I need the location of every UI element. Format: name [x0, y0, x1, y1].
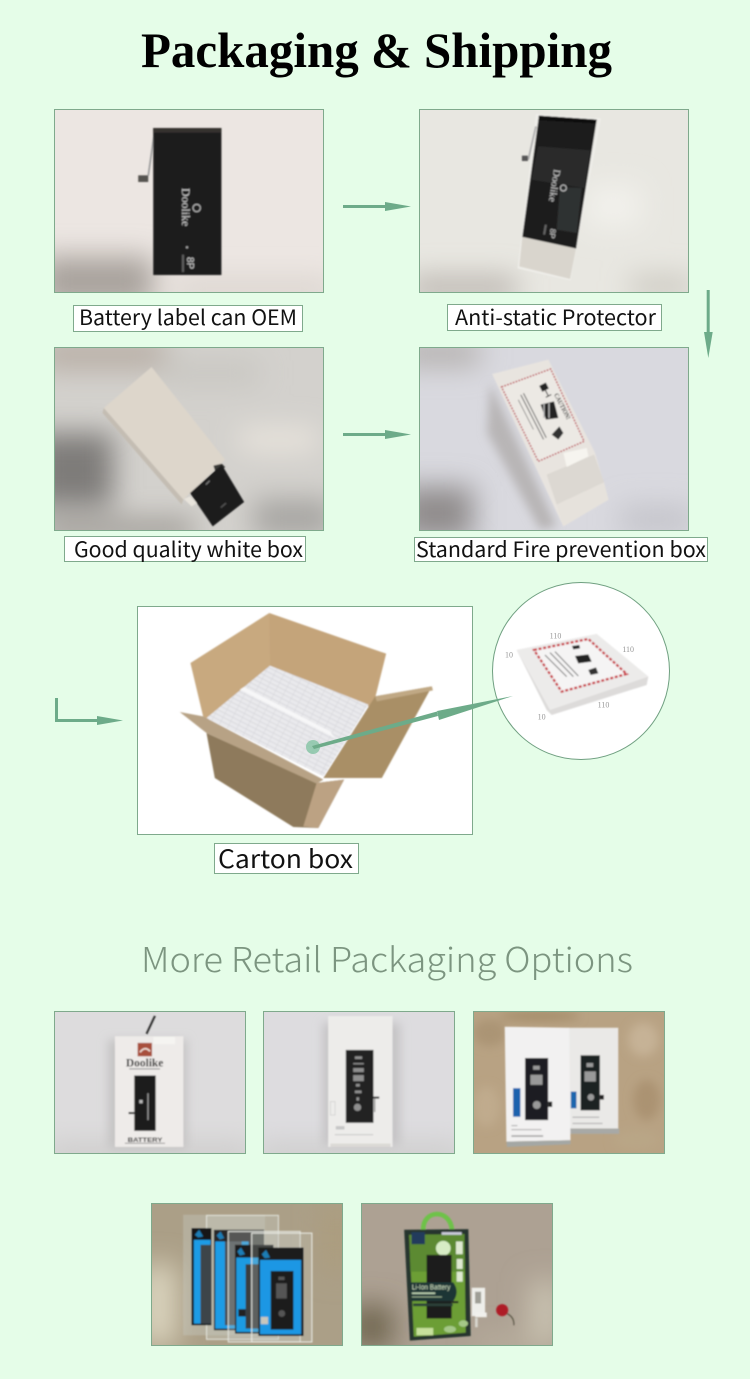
arrow: carton to detail circle	[306, 696, 513, 754]
arrow: elbow to carton	[55, 698, 123, 725]
stacked white boxes	[206, 666, 368, 776]
carton back left flap	[190, 613, 273, 720]
panel: retail option green hanging box	[350, 1203, 560, 1352]
panel: battery label photo: 8P	[184, 257, 195, 270]
panel: fire prevention box photo: CAUTION!	[552, 392, 571, 421]
panel: retail option clear blister packs	[140, 1203, 350, 1346]
panel: circle detail of single box: 110	[598, 701, 609, 710]
panel: anti-static protector photo: Doolike	[546, 169, 562, 203]
label: anti-static protector: Anti-static Protector	[455, 302, 657, 332]
panel: white box photo	[33, 340, 334, 540]
panel: circle detail of single box: 10	[505, 651, 513, 660]
panel: retail option Doolike card: BATTERY	[128, 1137, 163, 1144]
label: carton box: Carton box	[218, 840, 354, 876]
carton back right flap	[269, 613, 386, 706]
arrow: step 1 to 2	[343, 202, 411, 211]
panel: circle detail of single box: 10	[538, 712, 546, 721]
panel: circle detail of single box: 110	[550, 632, 561, 641]
carton right flap	[323, 686, 432, 778]
carton front flap	[180, 712, 323, 784]
panel: circle detail of single box: 110	[622, 645, 634, 654]
label: fire prevention box: Standard Fire prevention box	[416, 534, 707, 564]
panel: anti-static protector photo: 8P	[547, 228, 558, 239]
carton front body	[206, 733, 344, 828]
panel: fire prevention box photo	[400, 340, 694, 540]
panel: retail option Doolike card	[46, 1011, 254, 1164]
panel: retail option Doolike card: Doolike	[126, 1057, 163, 1069]
arrow: step 3 to 4	[343, 430, 411, 439]
panel: battery label photo: Doolike	[179, 188, 191, 226]
panel: circle detail of single box	[492, 582, 670, 760]
panel: battery label photo	[40, 109, 334, 306]
arrow: step 2 to 3	[704, 290, 713, 358]
panel: retail option pair of white boxes	[473, 1011, 665, 1154]
label: white box: Good quality white box	[74, 534, 304, 564]
label: battery label: Battery label can OEM	[79, 302, 297, 332]
panel: retail option green hanging box: Li-Ion Battery	[412, 1285, 451, 1292]
title: Packaging & Shipping	[141, 22, 612, 78]
heading: more retail packaging options: More Retail Packaging Options	[141, 933, 633, 982]
panel: retail option white box	[256, 1011, 463, 1164]
panel: carton box photo	[137, 606, 473, 834]
panel: anti-static protector photo	[410, 109, 694, 300]
